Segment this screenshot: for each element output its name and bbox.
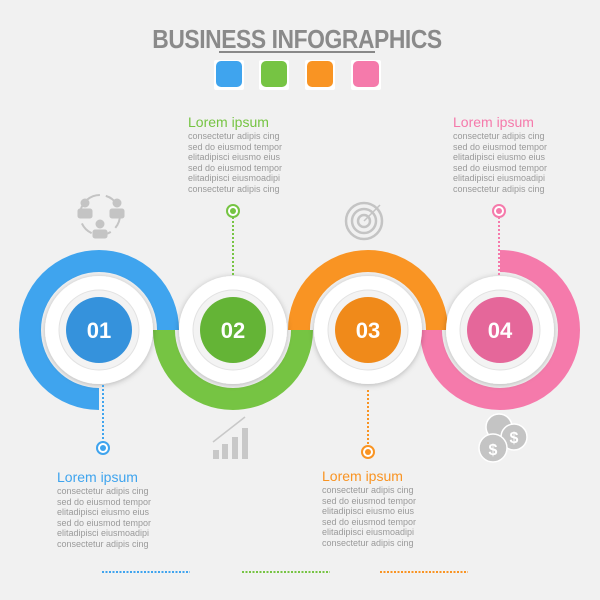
text block: pink: sed do eiusmod tempor xyxy=(453,162,547,172)
arc: orange xyxy=(299,261,437,330)
icon: target xyxy=(346,203,382,239)
text block: orange: consectetur adipis cing xyxy=(322,485,414,495)
circle 03: 03 xyxy=(356,318,380,343)
text block: blue xyxy=(57,469,151,549)
arc: pink xyxy=(431,261,569,399)
icon: dollar coins xyxy=(479,414,527,462)
text block: green: Lorem ipsum xyxy=(188,114,269,130)
text block: pink: Lorem ipsum xyxy=(453,114,534,130)
text block: green: consectetur adipis cing xyxy=(188,131,280,141)
text block: blue: sed do eiusmod tempor xyxy=(57,518,151,528)
text block: pink: consectetur adipis cing xyxy=(453,131,545,141)
pin: orange xyxy=(362,390,374,458)
text block: green: sed do eiusmod tempor xyxy=(188,142,282,152)
text block: blue: elitadipisci eiusmoadipi xyxy=(57,528,149,538)
pin: blue xyxy=(97,385,109,454)
title: BUSINESS INFOGRAPHICS xyxy=(152,24,442,54)
text block: blue: sed do eiusmod tempor xyxy=(57,496,151,506)
text block: pink xyxy=(453,114,547,194)
text block: orange: elitadipisci eiusmoadipi xyxy=(322,527,414,537)
icon: bar chart xyxy=(213,417,248,459)
text block: blue: elitadipisci eiusmo eius xyxy=(57,507,149,517)
text block: orange: sed do eiusmod tempor xyxy=(322,496,416,506)
text block: green: elitadipisci eiusmo eius xyxy=(188,152,280,162)
text block: pink: consectetur adipis cing xyxy=(453,184,545,194)
text block: orange: sed do eiusmod tempor xyxy=(322,516,416,526)
circle 04 xyxy=(446,276,554,384)
arc: green xyxy=(164,330,302,399)
circle 02: 02 xyxy=(221,318,245,343)
text block: orange: elitadipisci eiusmo eius xyxy=(322,506,414,516)
icon: dollar coins: $ xyxy=(489,442,498,459)
text block: pink: sed do eiusmod tempor xyxy=(453,142,547,152)
text block: orange: consectetur adipis cing xyxy=(322,538,414,548)
circle 01: 01 xyxy=(87,318,111,343)
circle 04: 04 xyxy=(488,318,513,343)
pin: green xyxy=(227,205,239,275)
text block: green: elitadipisci eiusmoadipi xyxy=(188,173,280,183)
icon: dollar coins: $ xyxy=(510,430,519,447)
text block: orange xyxy=(322,468,416,548)
circle 01 xyxy=(45,276,153,384)
text block: orange: Lorem ipsum xyxy=(322,468,403,484)
circle 02 xyxy=(179,276,287,384)
text block: green xyxy=(188,114,282,194)
text block: blue: consectetur adipis cing xyxy=(57,538,149,548)
text block: blue: consectetur adipis cing xyxy=(57,486,149,496)
bottom dashed lines xyxy=(102,571,468,573)
text block: green: consectetur adipis cing xyxy=(188,184,280,194)
icon: people xyxy=(78,195,124,238)
text block: blue: Lorem ipsum xyxy=(57,469,138,485)
arc: blue xyxy=(30,261,168,399)
color legend squares xyxy=(214,60,381,90)
circle 03 xyxy=(314,276,422,384)
text block: green: sed do eiusmod tempor xyxy=(188,162,282,172)
text block: pink: elitadipisci eiusmoadipi xyxy=(453,173,545,183)
text block: pink: elitadipisci eiusmo eius xyxy=(453,152,545,162)
pin: pink xyxy=(493,205,505,275)
